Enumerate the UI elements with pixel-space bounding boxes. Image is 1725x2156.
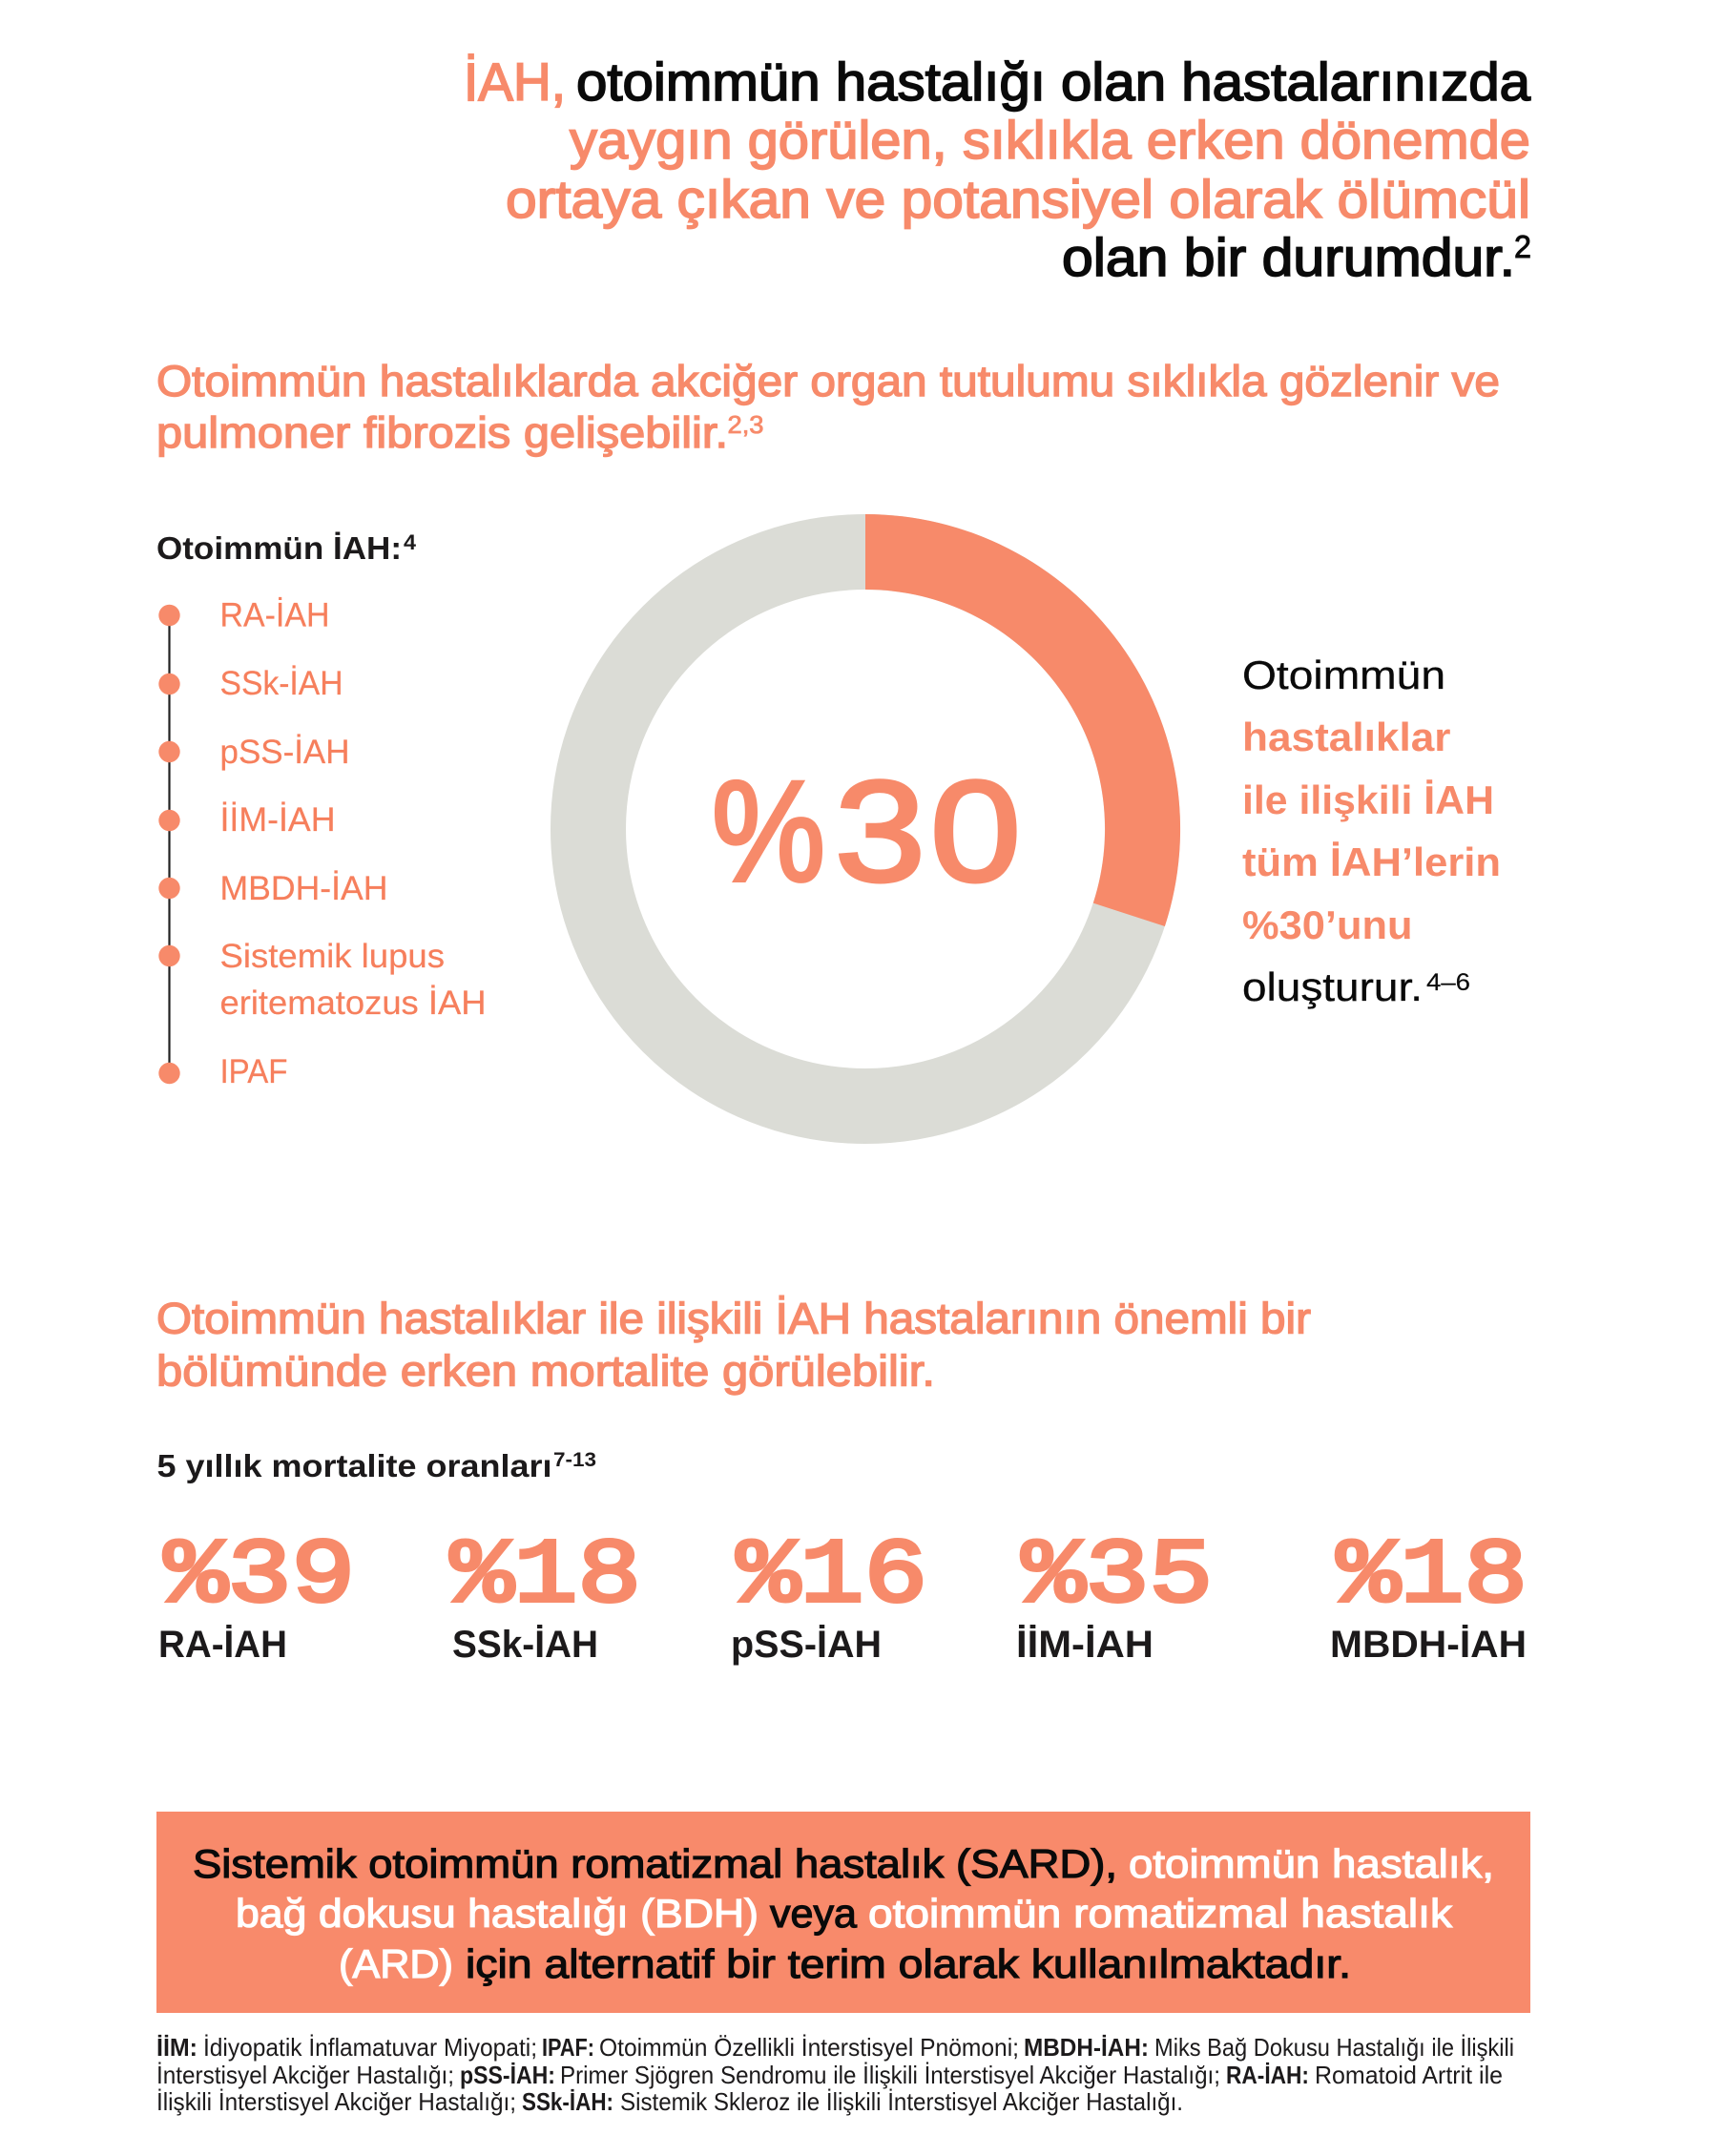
callout: SARD terminology: veya [770,1891,858,1936]
callout: SARD terminology: (ARD) [339,1941,453,1986]
stat: SSc-ILD [450,1524,641,1666]
callout: SARD terminology: otoimmün hastalık, [1129,1841,1494,1886]
stat: SSc-ILD: %18 [450,1524,641,1628]
donut description: Otoimmün [1242,653,1445,697]
stat: MCTD-ILD: %18 [1337,1524,1528,1628]
panel: autoimmune ILD list [156,530,487,1090]
footnote: abbreviations: Miks Bağ Dokusu Hastalığı ile İlişkili [1154,2033,1514,2062]
mortality subheading: 5 yıllık mortalite oranları [156,1448,551,1483]
donut description: hastalıklar [1242,715,1450,759]
footnote: abbreviations: İdiyopatik İnflamatuvar Miyopati; [203,2033,537,2062]
title: otoimmün hastalığı olan hastalarınızda [576,52,1531,112]
donut description: tüm İAH’lerin [1242,840,1501,884]
donut description: ile ilişkili İAH [1242,777,1494,822]
title: 2 [1514,229,1531,264]
list items: eritematozus İAH [219,985,487,1022]
callout: SARD terminology: için alternatif bir terim olarak kullanılmaktadır. [466,1941,1351,1986]
timeline with dots [158,605,180,1084]
list items [219,597,487,1090]
stat: MCTD-ILD [1330,1524,1528,1666]
footnote: abbreviations: Primer Sjögren Sendromu ile İlişkili İnterstisyel Akciğer Hastalığı; [560,2061,1220,2089]
list items: pSS-İAH [219,734,349,771]
stat: IIM-ILD: %35 [1022,1524,1213,1628]
stat: IIM-ILD: İİM-İAH [1016,1624,1153,1666]
footnote: abbreviations: RA-İAH: [1226,2061,1309,2089]
donut description: 4–6 [1426,969,1470,996]
heading: early mortality: Otoimmün hastalıklar ile ilişkili İAH hastalarının önemli bir [156,1294,1311,1343]
stat: RA-ILD: %39 [164,1524,355,1628]
list items: SSk-İAH [219,665,343,702]
footnote: abbreviations: Sistemik Skleroz ile İlişkili İnterstisyel Akciğer Hastalığı. [620,2087,1183,2116]
donut description [1242,653,1501,1009]
callout: SARD terminology: Sistemik otoimmün romatizmal hastalık (SARD), [193,1841,1117,1886]
list items: IPAF [219,1053,288,1090]
footnote: abbreviations: MBDH-İAH: [1024,2033,1149,2062]
heading: lung involvement: Otoimmün hastalıklarda akciğer organ tutulumu sıklıkla gözlenir ve [156,357,1500,405]
stat: pSS-ILD: %16 [737,1524,927,1628]
list items: RA-İAH [219,597,330,633]
donut value [712,751,1021,912]
footnote: abbreviations: SSk-İAH: [522,2087,613,2116]
stat: RA-ILD [158,1524,355,1666]
stat: SSc-ILD: SSk-İAH [452,1624,598,1666]
stat: IIM-ILD [1016,1524,1213,1666]
heading: early mortality [156,1294,1311,1395]
stat: pSS-ILD [731,1524,927,1666]
mortality subheading: 7-13 [553,1449,596,1471]
donut value: % [712,751,825,911]
donut description: oluşturur. [1242,964,1423,1009]
footnote: abbreviations [156,2033,1514,2116]
heading: lung involvement: 2,3 [727,410,763,439]
footnote: abbreviations: pSS-İAH: [460,2061,555,2089]
donut chart 30% [588,514,1180,1107]
stat: MCTD-ILD: MBDH-İAH [1330,1624,1527,1666]
footnote: abbreviations: IPAF: [542,2033,594,2062]
footnote: abbreviations: İlişkili İnterstisyel Akciğer Hastalığı; [156,2087,516,2116]
list items: MBDH-İAH [219,870,387,907]
list items: Sistemik lupus [219,938,445,975]
footnote: abbreviations: Romatoid Artrit ile [1315,2061,1503,2089]
donut description: %30’unu [1242,902,1412,947]
footnote: abbreviations: İİM: [156,2033,197,2062]
title: yaygın görülen, sıklıkla erken dönemde [570,110,1530,170]
title [464,52,1531,287]
heading: early mortality: bölümünde erken mortalite görülebilir. [156,1347,935,1395]
stat: RA-ILD: RA-İAH [158,1624,287,1666]
list heading: 4 [404,530,417,554]
title: olan bir durumdur. [1062,227,1515,287]
stat: pSS-ILD: pSS-İAH [731,1624,882,1666]
footnote: abbreviations: Otoimmün Özellikli İnterstisyel Pnömoni; [599,2033,1019,2062]
footnote: abbreviations: İnterstisyel Akciğer Hastalığı; [156,2061,454,2089]
callout: SARD terminology [156,1812,1530,2013]
title: ortaya çıkan ve potansiyel olarak ölümcül [506,169,1530,229]
list items: İİM-İAH [219,801,336,839]
title: İAH, [464,52,566,112]
heading: lung involvement: pulmoner fibrozis gelişebilir. [156,408,728,457]
callout: SARD terminology: bağ dokusu hastalığı (BDH) [236,1891,759,1936]
list heading: Otoimmün İAH: [156,530,402,566]
donut value: 30 [835,753,1021,912]
heading: lung involvement [156,357,1500,457]
callout: SARD terminology: otoimmün romatizmal hastalık [868,1891,1453,1936]
